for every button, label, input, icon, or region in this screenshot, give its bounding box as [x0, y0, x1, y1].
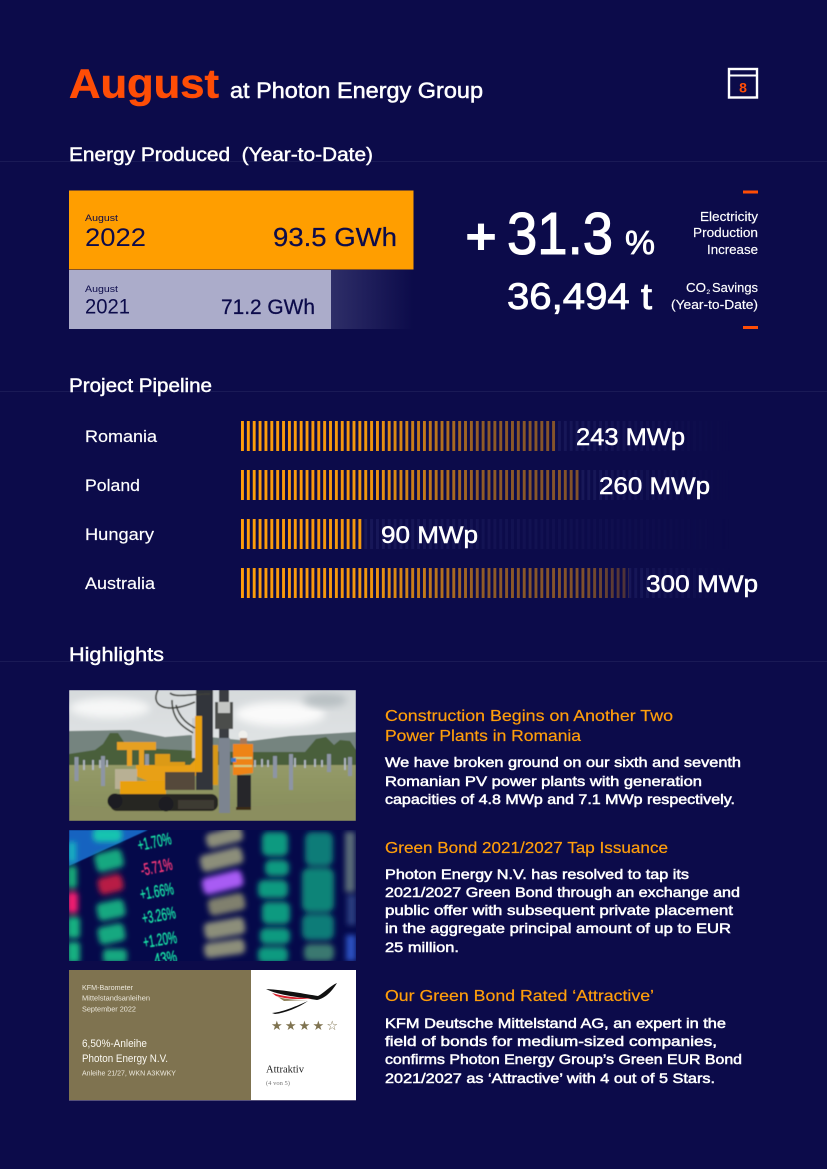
body	[385, 1015, 742, 1086]
blurred middle column	[199, 826, 246, 959]
rating stars: ★★★★☆	[271, 1019, 338, 1034]
body: capacities of 4.8 MWp and 7.1 MWp respectively.	[385, 791, 735, 807]
label: electricity production increase: Increase	[707, 243, 758, 257]
body: 25 million.	[385, 939, 459, 955]
accent dash top	[743, 190, 758, 194]
bar: August 2021: August	[85, 284, 118, 295]
hills	[69, 730, 356, 755]
row: Hungary: 90 MWp	[381, 522, 478, 549]
ticker percentages: +1.66%	[138, 879, 175, 904]
image: KFM barometer rating card	[69, 970, 356, 1101]
tracks	[110, 794, 218, 811]
body	[385, 754, 741, 807]
headline: Power Plants in Romania	[385, 728, 581, 745]
grass	[69, 764, 356, 813]
card text: barometer: 6,50%-Anleihe	[82, 1038, 147, 1050]
card text: barometer	[82, 985, 176, 1078]
body: We have broken ground on our sixth and seventh	[385, 754, 741, 770]
ticker percentages: +1.20%	[142, 928, 178, 952]
label: CO2 savings	[671, 281, 758, 312]
bar: August 2022: 2022	[85, 224, 146, 252]
photo: construction site in Romania	[69, 690, 356, 821]
headline	[385, 708, 673, 745]
row: Hungary: Hungary	[85, 526, 155, 544]
label: electricity production increase: Electricity	[700, 210, 759, 224]
headline: Construction Begins on Another Two	[385, 708, 673, 725]
label: electricity production increase: Production	[693, 226, 758, 240]
row: Australia	[85, 568, 758, 598]
body: 2021/2027 Green Bond through an exchange and	[385, 884, 740, 900]
panel: key figures	[465, 190, 759, 329]
heading: highlights: Highlights	[69, 645, 164, 666]
figure: production increase	[465, 201, 655, 267]
body: KFM Deutsche Mittelstand AG, an expert in the	[385, 1015, 726, 1031]
card text: barometer: KFM-Barometer	[82, 985, 134, 992]
row: Romania: Romania	[85, 428, 158, 446]
near posts	[76, 754, 350, 790]
row: Hungary	[86, 519, 502, 549]
accent dash bottom	[743, 326, 758, 329]
figure: production increase: %	[625, 224, 655, 261]
rating label: Attraktiv	[266, 1064, 304, 1076]
title	[69, 60, 483, 106]
row: Poland	[85, 470, 730, 500]
body: field of bonds for medium-sized companies,	[385, 1033, 717, 1049]
figure: production increase: 31.3	[507, 201, 613, 267]
blurred right columns	[258, 832, 356, 963]
heading: project pipeline: Project Pipeline	[69, 376, 212, 397]
row: Poland: Poland	[85, 477, 140, 495]
ticker percentages: +1.70%	[136, 829, 173, 855]
row: Australia: Australia	[85, 575, 156, 593]
text block: construction in Romania	[385, 708, 741, 807]
headline: Green Bond 2021/2027 Tap Issuance	[385, 840, 668, 857]
bar: August 2022	[69, 190, 414, 270]
title: August	[69, 60, 219, 106]
body	[385, 866, 740, 955]
body: Photon Energy N.V. has resolved to tap its	[385, 866, 689, 882]
rating label	[266, 1064, 304, 1087]
ticker percentages: -5.71%	[139, 855, 174, 880]
ticker percentages: .43%	[150, 947, 178, 970]
heading: energy produced: Energy Produced (Year-to-Date)	[69, 145, 373, 166]
label: CO2 savings: Savings	[712, 281, 758, 295]
icon: calendar	[729, 69, 757, 98]
card text: barometer: September 2022	[82, 1006, 136, 1014]
body: in the aggregate principal amount of up to EUR	[385, 920, 731, 936]
row: Romania	[85, 421, 730, 451]
panel: energy comparison bars	[69, 190, 414, 329]
trees	[69, 733, 356, 768]
distant posts	[84, 758, 345, 770]
pile	[219, 690, 229, 738]
label: CO2 savings: CO	[686, 281, 706, 295]
body: public offer with subsequent private placement	[385, 902, 733, 918]
bar: August 2021: 2021	[85, 296, 130, 318]
bar: August 2022: August	[85, 213, 118, 224]
icon: calendar: 8	[739, 80, 747, 96]
rating label: (4 von 5)	[266, 1080, 290, 1087]
figure: CO2 savings: 36,494 t	[507, 276, 653, 317]
bar: August 2021: 71.2 GWh	[221, 296, 315, 319]
card text: barometer: Mittelstandsanleihen	[82, 996, 150, 1002]
bar: August 2022: 93.5 GWh	[273, 222, 397, 252]
label: CO2 savings: 2	[706, 289, 710, 296]
text block: green bond tap issuance	[385, 840, 740, 955]
photo: stock ticker board	[67, 826, 356, 970]
row: Australia: 300 MWp	[646, 571, 758, 598]
title: at Photon Energy Group	[230, 78, 483, 103]
label: CO2 savings: (Year-to-Date)	[671, 298, 758, 312]
blurred left numbers	[67, 828, 127, 963]
text block: green bond rated attractive	[385, 988, 742, 1086]
chart: project pipeline bars	[85, 421, 758, 598]
figure: production increase: +	[465, 208, 497, 266]
ticker percentages: +3.26%	[140, 903, 177, 928]
row: Poland: 260 MWp	[599, 473, 710, 500]
worker	[238, 730, 248, 738]
row: Romania: 243 MWp	[576, 424, 685, 451]
bar: August 2021	[69, 270, 413, 329]
icon: KFM logo swoosh	[266, 983, 337, 1014]
card text: barometer: Photon Energy N.V.	[82, 1053, 168, 1065]
body: 2021/2027 as ‘Attractive’ with 4 out of 5 Stars.	[385, 1070, 715, 1086]
machine	[117, 742, 156, 750]
ticker percentages	[137, 832, 178, 961]
label: electricity production increase	[693, 210, 759, 257]
body: confirms Photon Energy Group’s Green EUR Bond	[385, 1051, 742, 1067]
card text: barometer: Anleihe 21/27, WKN A3KWKY	[82, 1070, 176, 1078]
body: Romanian PV power plants with generation	[385, 773, 702, 789]
headline: Our Green Bond Rated ‘Attractive’	[385, 988, 654, 1005]
